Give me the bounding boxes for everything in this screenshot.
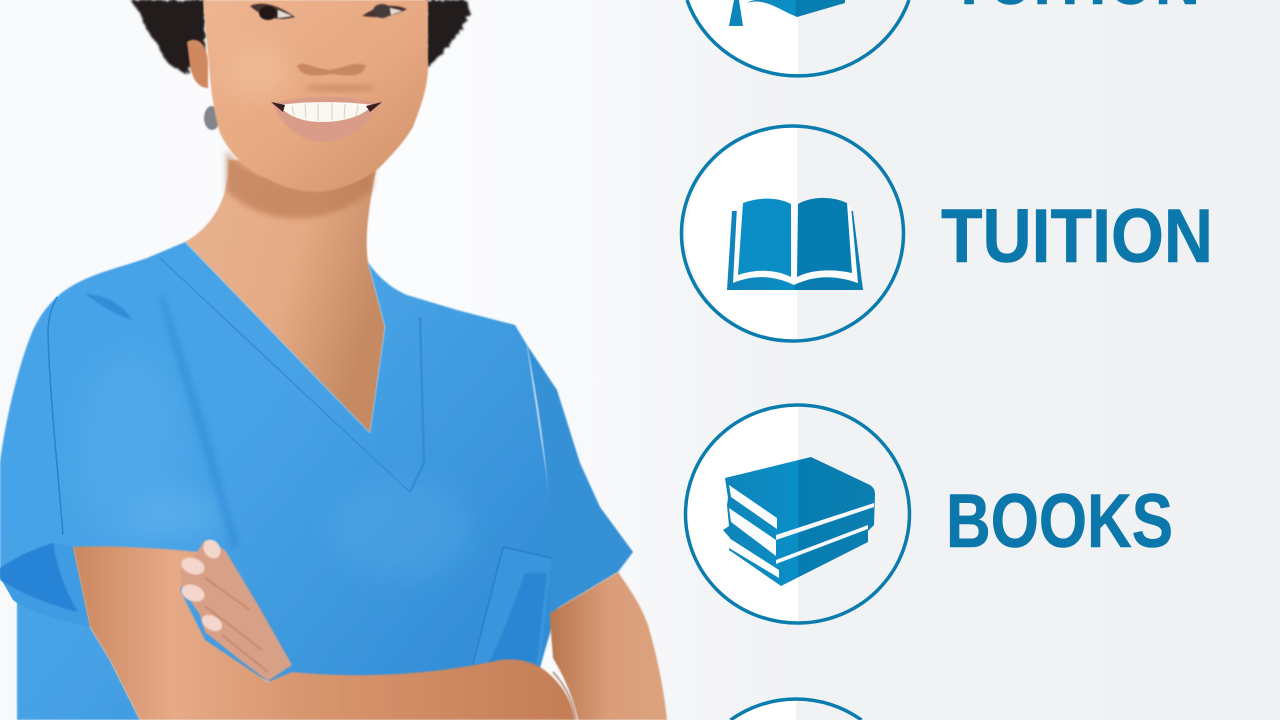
- earring: [204, 106, 220, 130]
- fold shadow: sleeve crease: [160, 293, 240, 550]
- pages middle: [729, 508, 776, 556]
- fold shadow: shoulder: [85, 294, 132, 320]
- book inner page gap: [733, 206, 858, 285]
- books silhouette: [723, 457, 875, 586]
- arm and forearm: [73, 546, 575, 720]
- label: tuition: TUITION: [941, 194, 1213, 279]
- tooth lines: [292, 103, 358, 121]
- eye right: [362, 4, 407, 18]
- mouth corners: [271, 102, 382, 112]
- cap board: [747, 0, 845, 17]
- sleeve highlight: [75, 350, 185, 550]
- face: [203, 0, 428, 192]
- spine gap 1: [776, 503, 874, 540]
- neck shadow: [226, 150, 378, 218]
- hair: [130, 0, 470, 74]
- teeth: [278, 102, 374, 122]
- icon circle 1: graduation cap: [687, 0, 909, 76]
- right page: [797, 198, 852, 277]
- scrub top body: [0, 242, 560, 720]
- hand: [180, 540, 292, 681]
- icon circle 3: stack of books: [686, 405, 910, 623]
- sleeve seam: [48, 297, 63, 535]
- nose: [297, 64, 366, 76]
- right sleeve: [515, 325, 633, 613]
- nails: [179, 536, 225, 635]
- photo: smiling nurse in blue scrubs: [0, 0, 667, 720]
- lips: [272, 96, 381, 142]
- crease between forearm and arm: [553, 672, 576, 720]
- pocket: [473, 547, 552, 664]
- lip shadow: [304, 84, 376, 92]
- label: books: BOOKS: [946, 479, 1173, 564]
- collar stitching right: [410, 317, 424, 492]
- finger creases: [205, 578, 268, 672]
- inner sleeve fold: [0, 543, 90, 627]
- left page: [738, 199, 791, 277]
- collar stitching left: [160, 258, 410, 492]
- cap tassel: [729, 0, 743, 26]
- icon circle 4: cropped at bottom: [730, 699, 862, 720]
- inner sleeve shadow: [0, 543, 78, 612]
- sleeve lower highlight: [130, 493, 220, 537]
- icon circle 2: open book: [682, 126, 904, 341]
- book cover: [727, 211, 863, 290]
- spine gap 2: [776, 525, 868, 564]
- ear: [187, 40, 208, 88]
- chest highlight: [330, 480, 470, 580]
- neck and chest: [185, 160, 385, 433]
- pages bottom: [729, 538, 779, 578]
- eye left: [250, 4, 295, 20]
- pages top: [729, 485, 777, 529]
- right arm: [550, 572, 667, 720]
- cheek highlight: [228, 48, 288, 96]
